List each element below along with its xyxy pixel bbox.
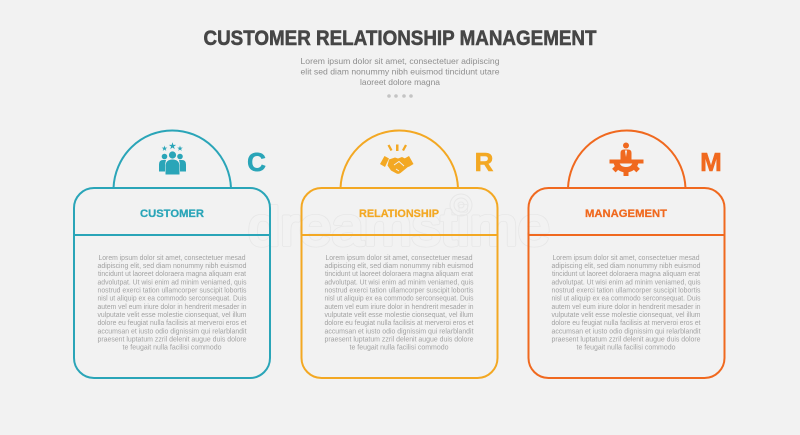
relationship body text: vulputate velit esse molestie cionsequat, vel illum [324,312,474,319]
customer body text: accumsan et iusto odio dignissim qui relarblandit [98,328,247,335]
relationship body text: advolutpat. Ut wisi enim ad minim veniamed, quis [324,279,474,286]
customer body text: adipiscing elit, sed diam nonummy nibh euismod [98,263,247,270]
watermark: dreamstime [248,197,550,257]
relationship body text [324,255,474,352]
relationship body text: nisl ut aliquip ex ea commodo serconsequat. Duis [324,296,474,303]
relationship body text: nostrud exerci tation ullamcorper suscipit lobortis [324,288,474,294]
letter R: R [475,147,494,177]
customer heading: CUSTOMER [140,208,204,220]
subtitle text: elit sed diam nonummy nibh euismod tincidunt utare [300,66,500,76]
management body text: praesent luptatum zzril delenit augue duis dolore [552,336,701,343]
pagination dots [387,94,413,98]
management body text: Lorem ipsum dolor sit amet, consectetuer mesad [552,255,700,262]
management body text: dolore eu feugiat nulla facilisis at merveroi eros et [552,320,701,327]
management body text: te feugait nulla facilisi commodo [576,345,676,352]
management body text: tincidunt ut laoreet doloraera magna aliquam erat [552,271,700,278]
relationship body text: accumsan et iusto odio dignissim qui relarblandit [324,328,474,335]
relationship body text: te feugait nulla facilisi commodo [350,345,449,352]
relationship heading: RELATIONSHIP [359,208,439,220]
relationship body text: Lorem ipsum dolor sit amet, consectetuer mesad [326,255,473,262]
relationship body text: adipiscing elit, sed diam nonummy nibh euismod [324,263,474,270]
subtitle text: Lorem ipsum dolor sit amet, consectetuer adipiscing [300,56,500,66]
management body text: advolutpat. Ut wisi enim ad minim veniamed, quis [552,279,701,286]
customer body text: Lorem ipsum dolor sit amet, consectetuer mesad [98,255,246,262]
relationship body text: praesent luptatum zzril delenit augue duis dolore [324,336,474,343]
management body text: nisl ut aliquip ex ea commodo serconsequat. Duis [552,296,701,303]
panel: customer [74,130,270,378]
management card outline [528,130,724,378]
management body text: adipiscing elit, sed diam nonummy nibh euismod [552,263,701,270]
watermark: dreamstime [248,197,550,257]
relationship body text: dolore eu feugiat nulla facilisis at merveroi eros et [324,320,474,327]
panel: relationship [302,130,498,378]
title: CUSTOMER RELATIONSHIP MANAGEMENT [204,27,597,50]
management body text [552,255,701,352]
letter M: M [700,147,722,177]
relationship body text: autem vel eum iriure dolor in hendrerit mesader in [324,304,474,311]
letter C: C [247,147,266,177]
management body text: nostrud exerci tation ullamcorper suscipit lobortis [552,288,701,294]
customer body text: vulputate velit esse molestie cionsequat, vel illum [98,312,247,319]
subtitle text [300,56,500,87]
customer body text: autem vel eum iriure dolor in hendrerit mesader in [98,304,247,311]
customer body text: tincidunt ut laoreet doloraera magna aliquam erat [98,271,246,278]
customer body text: nisl ut aliquip ex ea commodo serconsequat. Duis [98,296,247,303]
relationship body text: tincidunt ut laoreet doloraera magna aliquam erat [325,271,473,278]
management body text: accumsan et iusto odio dignissim qui relarblandit [552,328,701,335]
customer body text: dolore eu feugiat nulla facilisis at merveroi eros et [98,320,247,327]
icon: handshake [380,144,414,174]
customer card outline [74,130,270,378]
customer body text: advolutpat. Ut wisi enim ad minim veniamed, quis [98,279,247,286]
customer body text: nostrud exerci tation ullamcorper suscipit lobortis [98,288,247,294]
management heading: MANAGEMENT [585,208,667,220]
customer body text [98,255,247,352]
icon: customers with stars [159,142,186,174]
customer body text: praesent luptatum zzril delenit augue duis dolore [98,336,247,343]
relationship card outline [302,130,498,378]
management body text: autem vel eum iriure dolor in hendrerit mesader in [552,304,701,311]
subtitle text: laoreet dolore magna [360,77,440,87]
customer body text: te feugait nulla facilisi commodo [122,345,222,352]
management body text: vulputate velit esse molestie cionsequat, vel illum [552,312,701,319]
icon: person on gear [610,142,644,176]
panel: management [528,130,724,378]
